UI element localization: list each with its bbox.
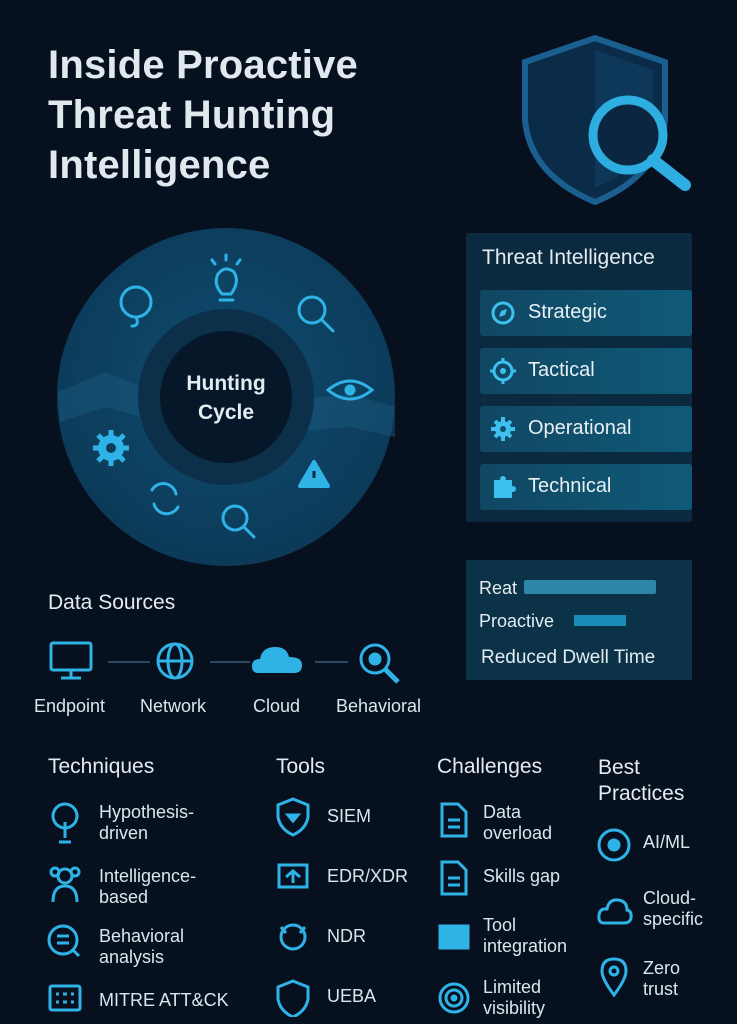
- column: best practices: Zero: [643, 958, 680, 978]
- heading: Threat Intelligence: [482, 246, 655, 269]
- column: challenges: Tool: [483, 915, 516, 935]
- column: techniques: based: [99, 887, 148, 907]
- column: techniques: Behavioral: [99, 926, 184, 946]
- column: best practices: Cloud-: [643, 888, 696, 908]
- chart: hunting cycle: Cycle: [198, 401, 254, 424]
- column: tools: SIEM: [327, 806, 371, 826]
- column: techniques: MITRE ATT&CK: [99, 990, 229, 1010]
- column: tools: EDR/XDR: [327, 866, 408, 886]
- data source labels: Network: [140, 696, 206, 716]
- row: technical: Technical: [528, 475, 611, 497]
- column: challenges: Data: [483, 802, 521, 822]
- search: [299, 297, 333, 331]
- column: techniques: Intelligence-: [99, 866, 196, 886]
- row: strategic: [480, 290, 692, 336]
- bulb left: [121, 287, 151, 326]
- row: operational: Operational: [528, 417, 631, 439]
- panel: comparison bars: [466, 560, 692, 680]
- row: technical: [480, 464, 692, 510]
- data source labels: Behavioral: [336, 696, 421, 716]
- column: best practices: trust: [643, 979, 678, 999]
- data source labels: Cloud: [253, 696, 300, 716]
- heading: data sources: Data Sources: [48, 591, 175, 614]
- warning: [300, 462, 328, 486]
- column: challenges: [437, 755, 567, 1018]
- icon: behavioral: [361, 645, 398, 682]
- icon: endpoint: [51, 643, 91, 678]
- chart: hunting cycle: Hunting: [186, 372, 266, 395]
- column: best practices: AI/ML: [643, 832, 690, 852]
- column: best practices: specific: [643, 909, 703, 929]
- title: Inside Proactive: [48, 43, 358, 87]
- icon: cloud: [252, 647, 302, 673]
- column: tools: Tools: [276, 755, 325, 778]
- column: best practices: Best: [598, 756, 640, 779]
- refresh: [152, 484, 178, 514]
- column: best practices: [597, 756, 703, 999]
- column: challenges: Limited: [483, 977, 541, 997]
- title: [48, 43, 358, 187]
- bar: proactive: Proactive: [479, 611, 554, 631]
- row: tactical: Tactical: [528, 359, 595, 381]
- column: tools: UEBA: [327, 986, 376, 1006]
- column: best practices: Practices: [598, 782, 684, 805]
- icon: shield with magnifier: [522, 34, 691, 206]
- bar: reactive: Reat: [479, 578, 517, 598]
- row: operational: [480, 406, 692, 452]
- column: techniques: Techniques: [48, 755, 154, 778]
- column: techniques: analysis: [99, 947, 164, 967]
- column: techniques: Hypothesis-: [99, 802, 194, 822]
- eye: [328, 381, 372, 399]
- column: tools: NDR: [327, 926, 366, 946]
- label: reduced dwell time: Reduced Dwell Time: [481, 647, 655, 668]
- data source labels: [34, 696, 421, 716]
- row: strategic: Strategic: [528, 301, 607, 323]
- icon: network: [158, 644, 192, 678]
- gear: [93, 430, 129, 466]
- column: techniques: driven: [99, 823, 148, 843]
- title: Intelligence: [48, 143, 270, 187]
- column: techniques: [48, 755, 229, 1012]
- data source labels: Endpoint: [34, 696, 105, 716]
- search bottom: [223, 506, 254, 537]
- column: challenges: Challenges: [437, 755, 542, 778]
- chart: hunting cycle: [57, 228, 395, 566]
- column: challenges: Skills gap: [483, 866, 560, 886]
- row: tactical: [480, 348, 692, 394]
- column: challenges: integration: [483, 936, 567, 956]
- column: challenges: overload: [483, 823, 552, 843]
- column: tools: [276, 755, 408, 1017]
- lightbulb: [212, 255, 240, 300]
- column: challenges: visibility: [483, 998, 545, 1018]
- title: Threat Hunting: [48, 93, 335, 137]
- panel: threat intelligence: [466, 233, 692, 522]
- data sources row: [50, 642, 400, 684]
